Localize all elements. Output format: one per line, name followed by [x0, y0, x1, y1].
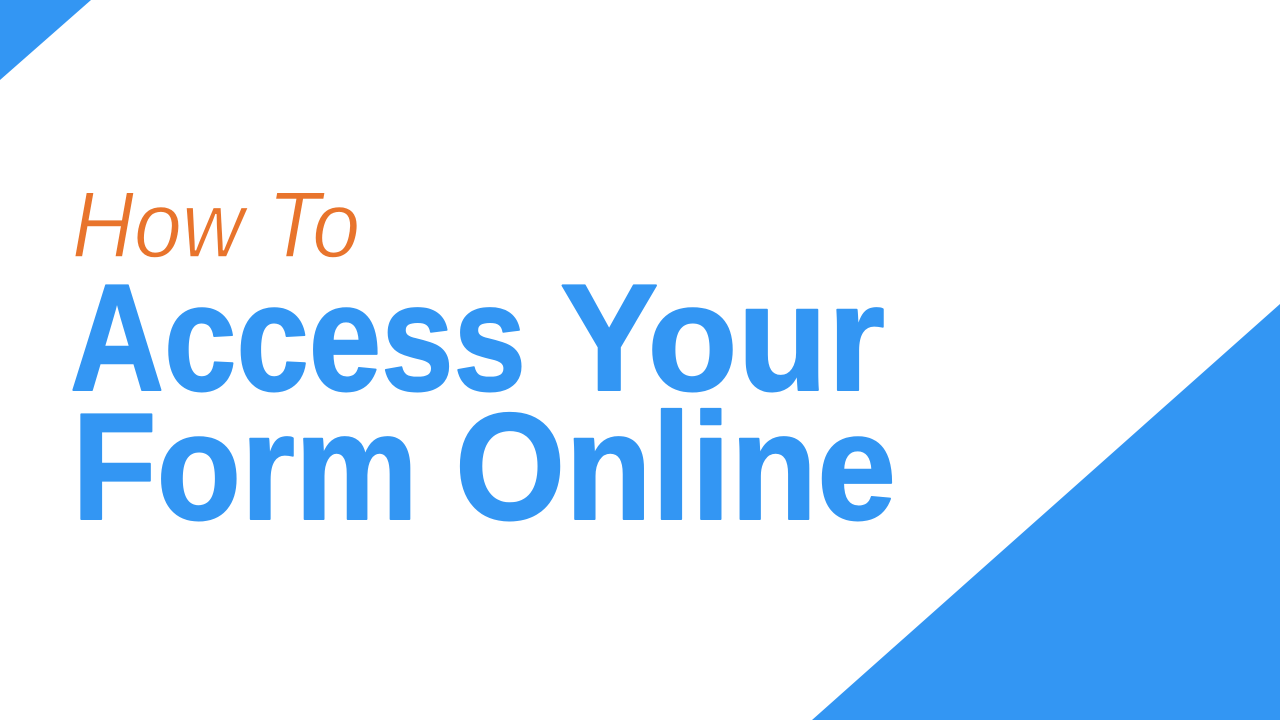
- corner triangle: bottom right: [812, 304, 1280, 720]
- title line 1: Access: [70, 253, 526, 423]
- subtitle: How To: How To: [72, 172, 360, 277]
- corner triangle: top left: [0, 0, 91, 80]
- title line 2: Form: [72, 382, 418, 552]
- title: [70, 253, 896, 552]
- title line 1: Your: [560, 253, 885, 423]
- title line 2: Online: [455, 382, 896, 552]
